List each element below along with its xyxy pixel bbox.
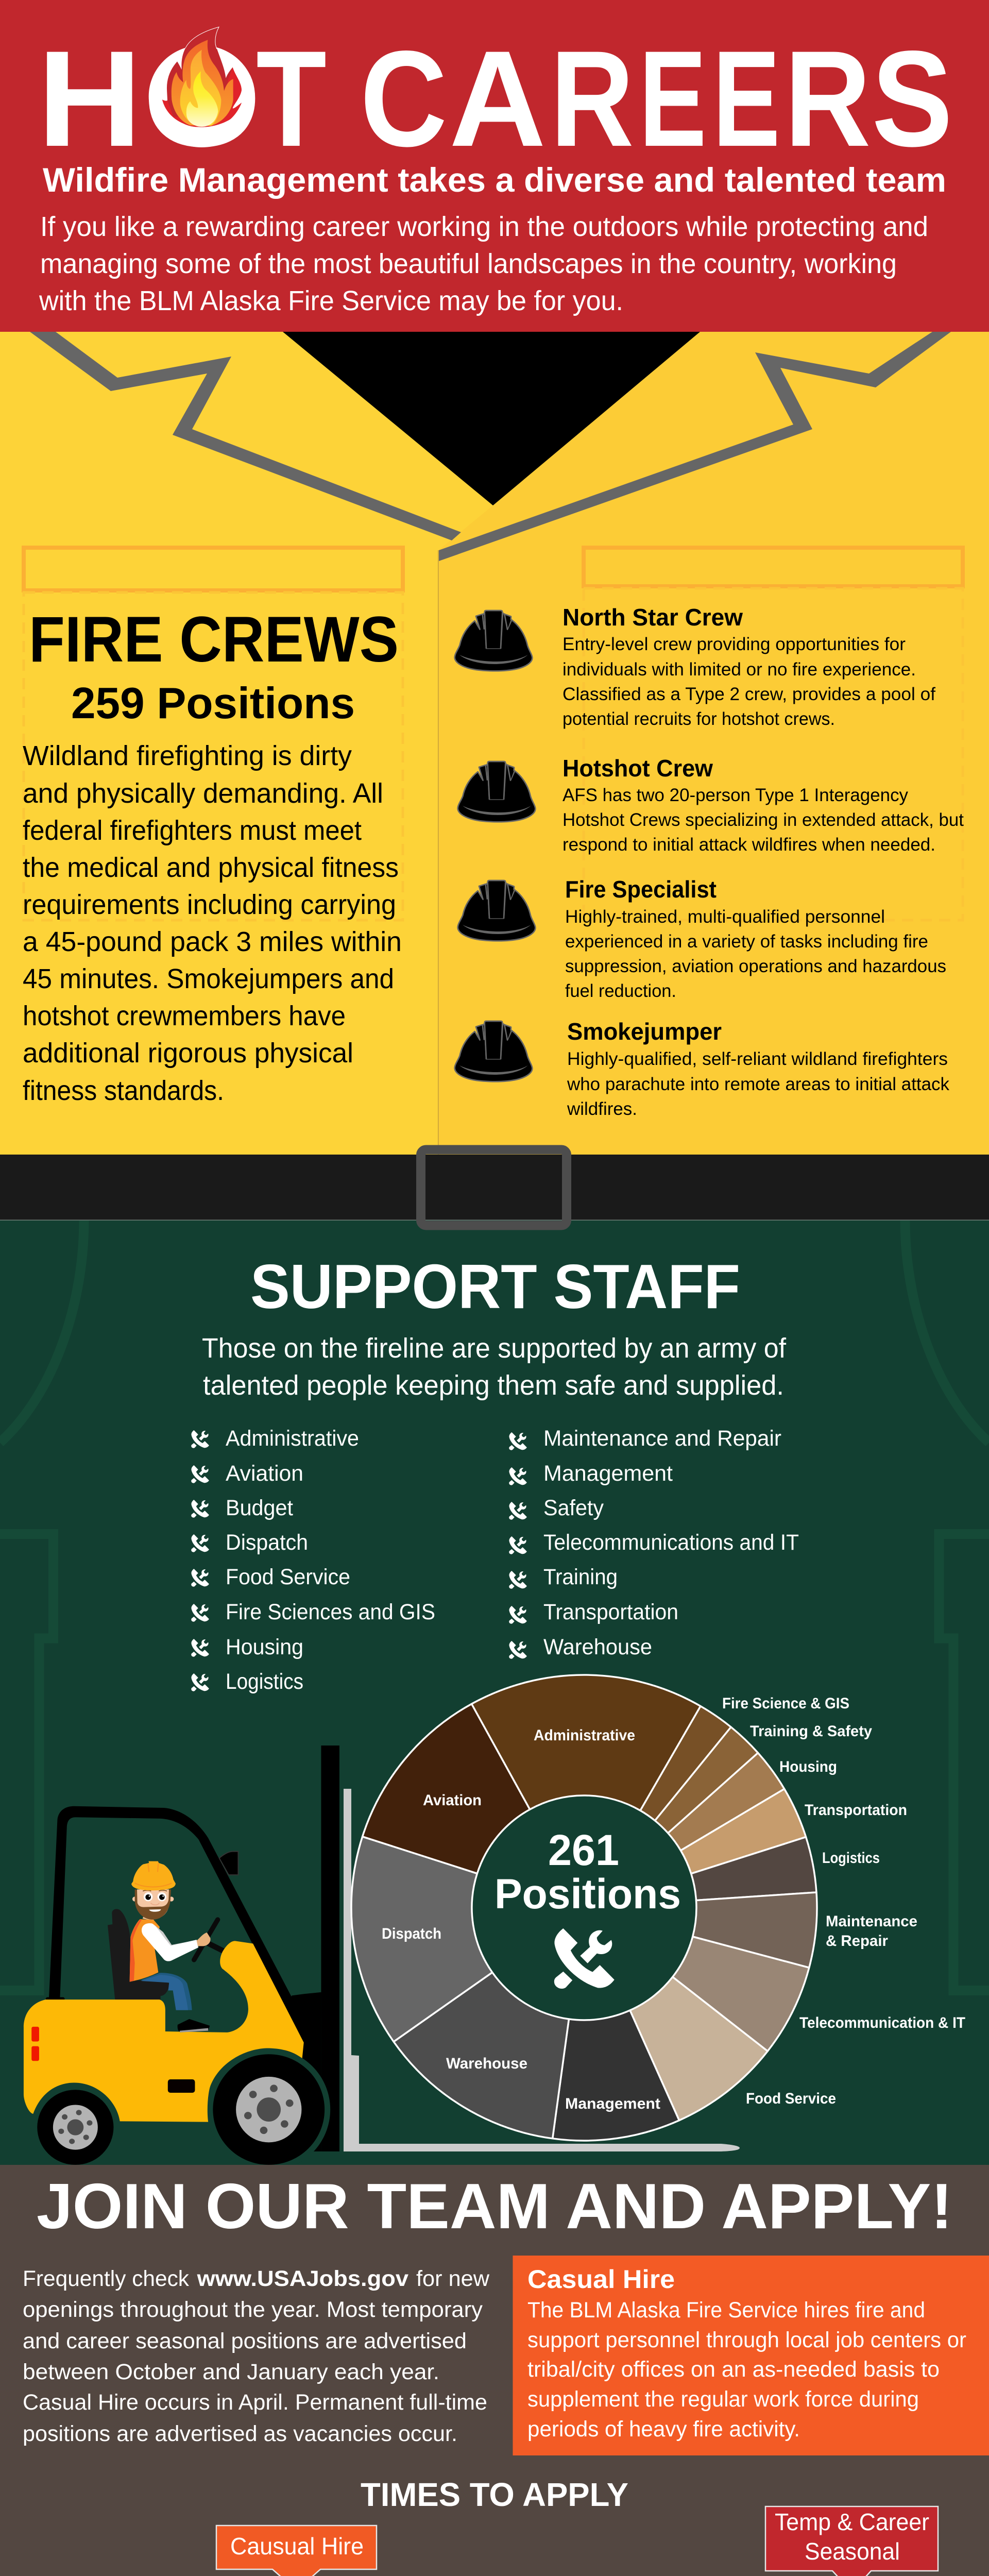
text block: fire crews description: federal firefighters must meet — [23, 815, 362, 846]
list: support jobs right column: Training — [543, 1565, 618, 1589]
callout: causual hire — [216, 2526, 377, 2576]
crew: fire specialist — [458, 876, 946, 1001]
crew: smokejumper — [455, 1018, 949, 1119]
callout: temp and career seasonal — [765, 2506, 938, 2576]
crew: fire specialist: suppression, aviation operations and hazardous — [565, 956, 946, 976]
callout: temp and career seasonal: Temp & Career — [775, 2509, 929, 2535]
list: support jobs right column: Management — [543, 1461, 673, 1486]
callout: temp and career seasonal: Seasonal — [805, 2538, 900, 2565]
chart labels: Dispatch — [382, 1925, 441, 1942]
chart labels: Management — [565, 2095, 660, 2112]
stat: 259 positions: 259 Positions — [71, 679, 355, 728]
right collar outline — [439, 332, 951, 561]
list: support jobs left column: Budget — [226, 1496, 293, 1520]
crew: fire specialist: experienced in a variety of tasks including fire — [565, 931, 928, 952]
text block: how to apply: Frequently check — [23, 2266, 189, 2291]
icon: helmet — [458, 761, 535, 822]
left pocket flap — [24, 548, 403, 590]
heading: support staff: SUPPORT STAFF — [250, 1251, 740, 1321]
crew: smokejumper: Highly-qualified, self-reliant wildland firefighters — [567, 1049, 948, 1069]
text block: fire crews description: hotshot crewmembers have — [23, 1001, 346, 1031]
right pocket flap — [584, 548, 963, 586]
crew: north star: Entry-level crew providing opportunities for — [562, 634, 906, 654]
title: H — [37, 23, 142, 175]
title: C — [360, 23, 447, 175]
panel: casual hire: supplement the regular work force during — [527, 2387, 919, 2412]
chart labels: Warehouse — [446, 2055, 527, 2072]
text block: how to apply: positions are advertised as vacancies occur. — [23, 2421, 457, 2446]
chart labels: Logistics — [822, 1850, 880, 1867]
list: support jobs right column: Maintenance and Repair — [543, 1426, 781, 1451]
text block: how to apply: www.USAJobs.gov — [191, 2266, 408, 2291]
chart labels: Food Service — [746, 2090, 836, 2107]
heading: fire crews: FIRE CREWS — [29, 604, 399, 675]
crew: north star: North Star Crew — [562, 604, 743, 631]
icon: belt buckle — [421, 1150, 567, 1225]
chart labels: Housing — [779, 1758, 837, 1775]
chart labels: Telecommunication & IT — [799, 2014, 965, 2031]
title: S — [872, 23, 952, 175]
panel: yellow jacket — [0, 332, 989, 1155]
crew: smokejumper: wildfires. — [567, 1099, 637, 1119]
belt — [0, 1150, 989, 1225]
icon: flame in the O — [149, 27, 255, 147]
text block: fire crews description: fitness standards. — [23, 1075, 224, 1106]
chart labels: Aviation — [423, 1792, 482, 1809]
list: support jobs left column — [191, 1426, 435, 1694]
crew: smokejumper: who parachute into remote areas to initial attack — [567, 1074, 949, 1094]
crew: hotshot — [458, 755, 964, 855]
icon: forklift with driver — [46, 1745, 339, 2171]
panel: red header — [0, 0, 989, 332]
crew: north star: Classified as a Type 2 crew, provides a pool of — [562, 684, 935, 704]
crew: hotshot: Hotshot Crew — [562, 755, 713, 782]
list: support jobs left column: Dispatch — [226, 1530, 308, 1555]
icon: forklift body — [24, 1941, 325, 2165]
text block: support intro: talented people keeping them safe and supplied. — [203, 1370, 784, 1401]
panel: casual hire: periods of heavy fire activity. — [527, 2417, 800, 2442]
list: support jobs right column: Transportation — [543, 1600, 678, 1624]
text block: how to apply: openings throughout the year. Most temporary — [23, 2297, 483, 2322]
intro paragraph — [39, 211, 928, 316]
intro paragraph: If you like a rewarding career working in the outdoors while protecting and — [40, 211, 928, 242]
chart labels: Transportation — [805, 1802, 907, 1819]
list: support jobs left column: Fire Sciences and GIS — [226, 1600, 435, 1624]
chart labels: Maintenance — [826, 1913, 917, 1930]
list: support jobs left column: Housing — [226, 1635, 303, 1659]
icon: worker driving — [108, 1861, 227, 2010]
chart labels: & Repair — [826, 1933, 888, 1950]
crew: fire specialist: Highly-trained, multi-qualified personnel — [565, 907, 885, 927]
chart labels: Administrative — [534, 1727, 635, 1744]
title: T — [256, 23, 327, 175]
text block: support intro: Those on the fireline are supported by an army of — [202, 1333, 787, 1364]
icon: forklift forks — [344, 1789, 740, 2151]
icon: helmet — [455, 611, 532, 671]
panel: casual hire: Casual Hire — [527, 2265, 675, 2294]
text block: fire crews description: a 45-pound pack 3 miles within — [23, 926, 402, 957]
title: R — [785, 23, 871, 175]
panel: casual hire — [513, 2256, 989, 2455]
heading: join our team: JOIN OUR TEAM AND APPLY! — [37, 2171, 952, 2242]
intro paragraph: with the BLM Alaska Fire Service may be for you. — [39, 285, 623, 316]
panel: casual hire: support personnel through local job centers or — [527, 2328, 966, 2352]
title: E — [639, 23, 707, 175]
chart labels: Fire Science & GIS — [722, 1695, 849, 1712]
title: R — [551, 23, 634, 175]
panel: casual hire: tribal/city offices on an as-needed basis to — [527, 2357, 940, 2382]
crew: north star: individuals with limited or no fire experience. — [562, 659, 916, 680]
crew: fire specialist: Fire Specialist — [565, 876, 717, 903]
subtitle: Wildfire Management takes a diverse and talented team — [43, 161, 946, 199]
jacket neck opening — [283, 332, 700, 505]
text block: fire crews description: the medical and physical fitness — [23, 852, 399, 883]
stat: 261 positions — [494, 1826, 681, 1918]
text block: support intro — [202, 1333, 787, 1401]
list: support jobs left column: Aviation — [226, 1461, 303, 1486]
text block: how to apply: and career seasonal positions are advertised — [23, 2329, 467, 2353]
chart: donut of support positions — [351, 1675, 817, 2141]
chart labels — [382, 1695, 965, 2112]
text block: fire crews description: additional rigorous physical — [23, 1038, 353, 1069]
left collar outline — [30, 332, 461, 540]
list: support jobs right column: Warehouse — [543, 1635, 652, 1659]
icon: phone and wrench — [554, 1928, 615, 1989]
crew: hotshot: respond to initial attack wildfires when needed. — [562, 835, 935, 855]
list: support jobs right column: Safety — [543, 1496, 604, 1520]
panel: green support staff — [0, 1221, 989, 2171]
crew: north star — [455, 604, 935, 729]
title: O — [143, 23, 262, 175]
chart labels: Training & Safety — [750, 1723, 872, 1740]
intro paragraph: managing some of the most beautiful landscapes in the country, working — [40, 248, 897, 279]
title: A — [449, 23, 546, 175]
list: support jobs left column: Logistics — [226, 1669, 303, 1694]
list: support jobs right column: Telecommunications and IT — [543, 1530, 799, 1555]
heading: times to apply: TIMES TO APPLY — [361, 2476, 628, 2513]
panel: join our team — [0, 2165, 989, 2576]
text block: how to apply: for new — [410, 2266, 490, 2291]
text block: fire crews description — [23, 740, 402, 1106]
text block: fire crews description: 45 minutes. Smokejumpers and — [23, 963, 394, 994]
text block: fire crews description: Wildland firefighting is dirty — [23, 740, 352, 771]
stat: 261 positions: 261 — [548, 1826, 619, 1874]
panel: casual hire: The BLM Alaska Fire Service hires fire and — [527, 2298, 925, 2323]
crew: smokejumper: Smokejumper — [567, 1018, 722, 1045]
crew: fire specialist: fuel reduction. — [565, 981, 676, 1001]
title: E — [713, 23, 780, 175]
text block: fire crews description: requirements including carrying — [23, 889, 396, 920]
text block: fire crews description: and physically demanding. All — [23, 778, 383, 809]
text block: how to apply: between October and January each year. — [23, 2360, 439, 2384]
crew: hotshot: Hotshot Crews specializing in extended attack, but — [562, 810, 964, 830]
icon: helmet — [458, 880, 535, 941]
list: support jobs right column — [509, 1426, 799, 1659]
list: support jobs left column: Food Service — [226, 1565, 350, 1589]
crew: hotshot: AFS has two 20-person Type 1 Interagency — [562, 785, 908, 805]
text block: how to apply: Casual Hire occurs in April. Permanent full-time — [23, 2390, 487, 2415]
icon: helmet — [455, 1021, 532, 1081]
text block: how to apply — [23, 2266, 490, 2446]
crew: north star: potential recruits for hotshot crews. — [562, 709, 835, 729]
stat: 261 positions: Positions — [494, 1871, 681, 1918]
list: support jobs left column: Administrative — [226, 1426, 359, 1451]
callout: causual hire: Causual Hire — [230, 2533, 364, 2560]
